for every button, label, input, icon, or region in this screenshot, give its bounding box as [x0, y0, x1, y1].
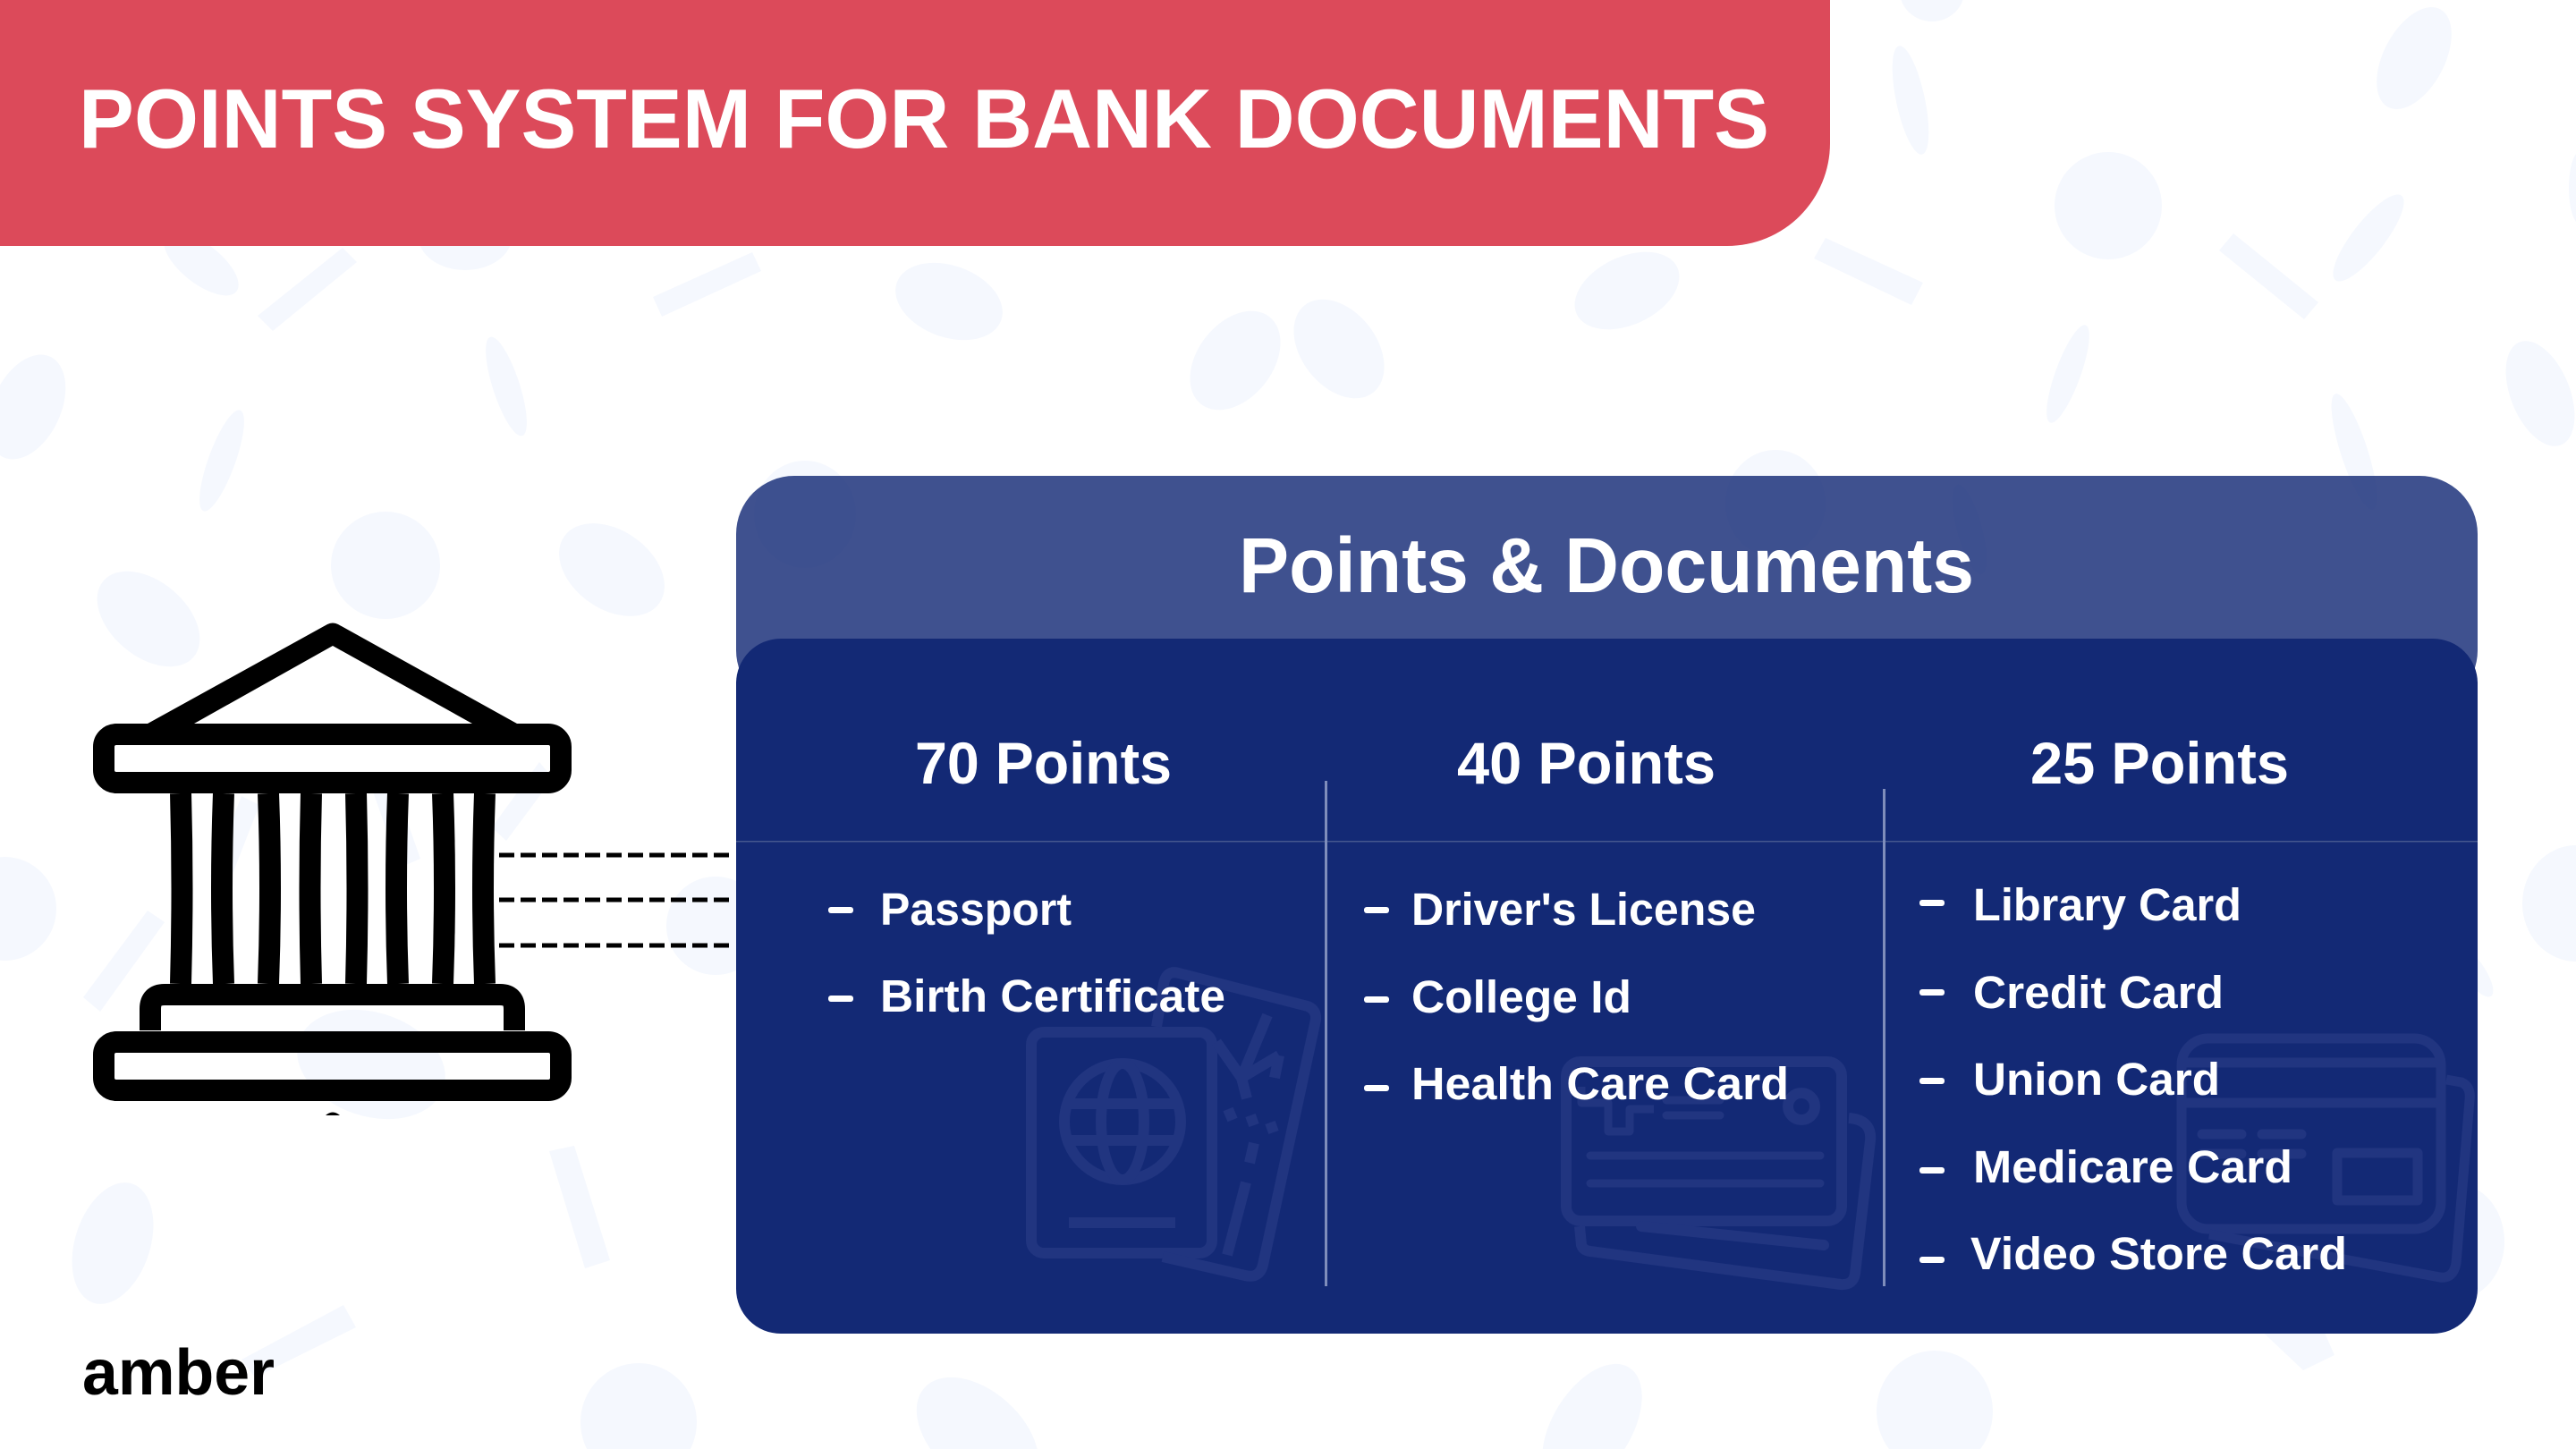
- dashed connectors: [499, 855, 735, 945]
- item: passport: Passport: [880, 884, 1072, 935]
- panel header: [736, 476, 2478, 708]
- item: library card: Library Card: [1973, 879, 2241, 930]
- column heading: 40 Points: [1457, 730, 1716, 796]
- icon: passport watermark: [1031, 972, 1316, 1276]
- pediment: [148, 623, 517, 724]
- title text: POINTS SYSTEM FOR BANK DOCUMENTS: [79, 72, 1769, 165]
- column heading: 25 Points: [2030, 730, 2289, 796]
- column: 40 points: [1364, 730, 1789, 1109]
- column divider 2: [1883, 789, 1885, 1286]
- item: driver's license: Driver's License: [1411, 884, 1756, 935]
- bottom step: [104, 1042, 561, 1090]
- title banner: [0, 0, 1830, 246]
- header rule: [736, 841, 2478, 843]
- icon: ID cards watermark: [1566, 1062, 1870, 1284]
- top beam: [104, 734, 561, 783]
- icon: bank building: [104, 623, 561, 1115]
- panel body: [736, 639, 2478, 1334]
- item: birth certificate: Birth Certificate: [880, 970, 1225, 1021]
- column divider 1: [1325, 781, 1327, 1286]
- column: 70 points: [828, 730, 1225, 1021]
- item: health care card: Health Care Card: [1411, 1058, 1789, 1109]
- panel: points and documents: [736, 476, 2478, 1334]
- item: credit card: Credit Card: [1973, 967, 2224, 1018]
- column: 25 points: [1919, 730, 2347, 1279]
- item: medicare card: Medicare Card: [1973, 1141, 2292, 1192]
- columns: [181, 793, 485, 984]
- column heading: 70 Points: [915, 730, 1172, 796]
- icon: credit card watermark: [2182, 1038, 2470, 1277]
- item: union card: Union Card: [1973, 1054, 2220, 1105]
- logo: amber: amber: [82, 1337, 275, 1409]
- item: video store card: Video Store Card: [1970, 1228, 2347, 1279]
- column base: [150, 995, 514, 1030]
- item: college id: College Id: [1411, 971, 1631, 1022]
- panel heading: Points & Documents: [1239, 522, 1974, 609]
